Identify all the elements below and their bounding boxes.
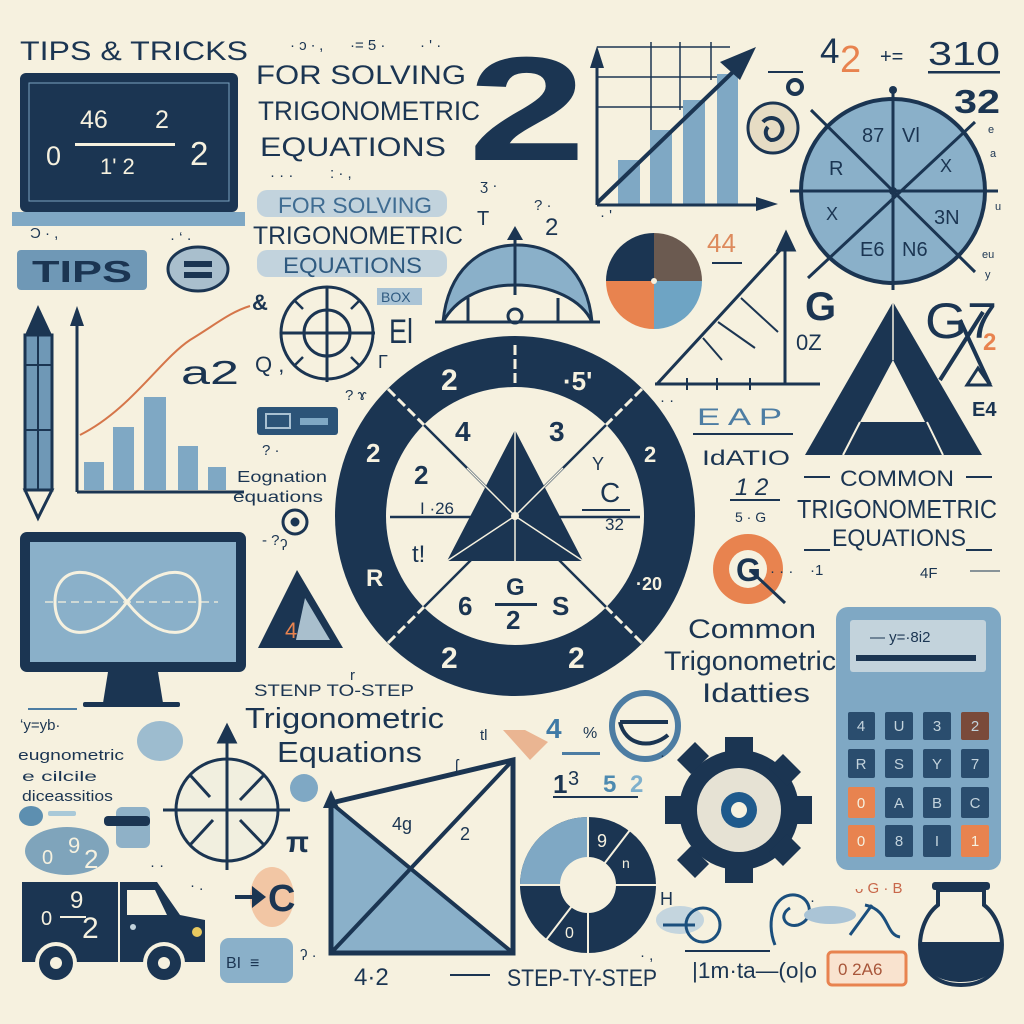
title: for solving trigonometric equations: EQUATIONS — [260, 132, 446, 162]
pie chart bottom center: n — [622, 855, 630, 871]
heading: common trigonometric identities: Trigonometric — [664, 646, 836, 676]
scattered math symbols: ·1 — [810, 562, 823, 579]
icon: target dot — [283, 510, 307, 534]
banner: for solving trigonometric equations: TRIGONOMETRIC — [253, 222, 463, 250]
pie wheel top right: X — [826, 204, 838, 224]
small labels: E1 and box: El — [389, 313, 413, 351]
central circular diagram: S — [552, 591, 569, 621]
small labels: E1 and box — [252, 288, 422, 351]
icon row: blue letters above idatio: E A P — [697, 404, 782, 431]
icon: blue blob — [137, 721, 183, 761]
calculator: 3 — [933, 718, 941, 735]
pie chart quarters — [606, 233, 702, 329]
small math: 1 3 over 52: 5 — [603, 771, 616, 798]
bar chart with rising arrow — [590, 42, 778, 211]
small blue numeral and orange mark: 4 — [546, 713, 562, 744]
scattered math symbols: Γ — [378, 352, 388, 372]
text: small blurred labels lower left: eugnometric — [18, 747, 125, 764]
heading: step-to-step trigonometric equations: Trigonometric — [245, 703, 444, 735]
pill formula: 0 — [42, 847, 53, 869]
small triangle warning icon — [258, 570, 343, 648]
scattered math symbols: · ɔ ∙ , — [290, 37, 323, 54]
side scribbles beside wheel: a — [990, 148, 997, 160]
central circular diagram: C — [600, 477, 620, 508]
arrow with C — [235, 867, 295, 927]
small labels: E1 and box: & — [252, 290, 268, 315]
formula top right: 2 — [840, 39, 861, 81]
central circular diagram: R — [366, 565, 383, 592]
icon: small blue panel: ≡ — [250, 955, 259, 972]
line and bar chart — [70, 306, 250, 492]
central circular diagram: 2 — [644, 442, 656, 467]
pie wheel top right: Vl — [902, 125, 920, 147]
wheel diagram lower left — [163, 726, 290, 870]
calculator: 4 — [857, 718, 865, 735]
icon: oval symbol — [168, 247, 228, 291]
scattered math symbols: · — [810, 892, 815, 909]
scattered math symbols: · · · — [270, 167, 293, 184]
calculator: U — [894, 718, 904, 735]
small math: 1 3 over 52: 1 — [553, 769, 567, 799]
scattered math symbols: ·= 5 · — [350, 37, 385, 54]
calculator: C — [970, 795, 981, 812]
scattered math symbols: ? ɤ — [345, 387, 368, 404]
central circular diagram: 2 — [441, 642, 458, 675]
scattered math symbols: · · — [150, 857, 164, 874]
side scribbles beside wheel — [982, 124, 1001, 281]
scattered math symbols: tl — [480, 727, 488, 744]
letter G and 0Z — [796, 285, 836, 355]
pie wheel top right: E6 — [860, 239, 884, 261]
text: small blurred labels lower left: e cilcile — [22, 768, 97, 784]
small math: 1 3 over 52: 3 — [568, 768, 579, 790]
calculator: 0 — [857, 833, 865, 850]
letter pi glyph: π — [286, 826, 309, 859]
scattered math symbols: - ? — [262, 532, 280, 549]
icon: swirl circle — [612, 693, 678, 759]
small blue numeral and orange mark: % — [583, 725, 597, 742]
calculator: S — [894, 756, 904, 773]
calculator: 0 — [857, 795, 865, 812]
truck icon: 0 — [41, 908, 52, 930]
small labels: E1 and box: BOX — [381, 289, 411, 305]
text: equations blurred labels — [233, 469, 327, 506]
calculator: R — [856, 756, 867, 773]
central circular diagram: 2 — [366, 438, 380, 468]
central circular diagram: 2 — [568, 642, 585, 675]
label: common trigonometric equations banner: COMMON — [840, 466, 954, 491]
flask icon — [920, 882, 1002, 985]
scattered math symbols: 4F — [920, 565, 938, 582]
pie wheel top right: 87 — [862, 125, 884, 147]
heading: common trigonometric identities — [664, 614, 836, 708]
pie chart bottom center: 0 — [565, 925, 574, 942]
central circular diagram: 2 — [506, 605, 520, 635]
heading: step-to-step trigonometric equations: Equations — [277, 737, 422, 769]
pie wheel top right: X — [940, 156, 952, 176]
calculator: Y — [932, 756, 942, 773]
heading: step-to-step trigonometric equations — [245, 681, 444, 769]
central circular diagram: 2 — [441, 364, 458, 397]
banner: for solving trigonometric equations — [253, 190, 463, 278]
text: small blurred labels lower left: diceassitios — [22, 788, 113, 805]
big triangle A icon — [805, 302, 982, 455]
pill formula — [25, 827, 109, 875]
large rectangle with crossing lines — [323, 760, 513, 953]
formula top right: 4 — [820, 32, 839, 71]
fraction label: idatio 1/2: IdATIO — [702, 447, 790, 470]
side scribbles beside wheel: e — [988, 124, 994, 136]
large rectangle with crossing lines: 4g — [392, 814, 412, 834]
label: common trigonometric equations banner: EQUATIONS — [832, 525, 966, 552]
scattered math symbols: Ɔ · , — [30, 225, 58, 242]
pill formula: 9 — [68, 833, 80, 858]
letters top right: G7 — [925, 293, 997, 349]
icon: monitor with fraction: 0 — [46, 141, 61, 171]
icon: spiral beside formula — [768, 72, 803, 94]
scattered math symbols: ʔ — [280, 537, 288, 554]
scattered math symbols: · ' — [600, 207, 612, 224]
small blue numeral and orange mark — [503, 713, 600, 760]
small math: 1 3 over 52 — [553, 768, 643, 799]
pie chart bottom center — [520, 817, 656, 953]
label: step-by-step: STEP-TY-STEP — [507, 965, 657, 992]
badge: tips — [17, 250, 147, 290]
scattered math symbols: · . — [190, 877, 203, 894]
title: for solving trigonometric equations: FOR SOLVING — [256, 60, 466, 90]
pill formula: 2 — [84, 844, 98, 874]
text: equations blurred labels: equations — [233, 489, 323, 506]
pie wheel top right: R — [829, 158, 843, 180]
scattered math symbols: T — [477, 208, 489, 230]
title: tips and tricks: TIPS & TRICKS — [20, 36, 248, 66]
fraction label: idatio 1/2 — [693, 433, 793, 525]
scattered math symbols: · · — [660, 392, 674, 409]
pie wheel top right — [790, 86, 998, 290]
truck icon: 9 — [70, 887, 83, 914]
formula top right — [820, 32, 1000, 120]
label below rectangle — [354, 964, 490, 991]
line and bar chart: a2 — [181, 354, 239, 391]
label: common trigonometric equations banner — [797, 466, 997, 552]
calculator: — y=·8i2 — [870, 629, 930, 646]
title: for solving trigonometric equations: TRIGONOMETRIC — [258, 96, 480, 126]
swirl icons row — [656, 895, 900, 945]
icon: orange circle with G — [713, 534, 785, 604]
big numeral 2: 2 — [468, 27, 586, 192]
small triangle warning icon: 4 — [285, 618, 297, 643]
side scribbles beside wheel: eu — [982, 249, 994, 261]
small blue bits near pill — [19, 806, 76, 826]
scattered math symbols: ʃ — [454, 757, 460, 774]
small marks: right side: E4 — [972, 399, 997, 421]
label below rectangle: 4·2 — [354, 964, 389, 991]
scattered math symbols: ? · — [534, 197, 552, 214]
central circular diagram: 4 — [455, 416, 471, 447]
calculator: 1 — [971, 833, 979, 850]
scattered math symbols: : · , — [330, 165, 352, 182]
text: small blurred labels lower left — [18, 708, 125, 805]
fraction label: idatio 1/2: 5 · G — [735, 509, 766, 525]
central circular diagram — [335, 336, 695, 696]
icon: monitor with fraction: 2 — [155, 106, 169, 134]
scattered math symbols: · ʻ · — [170, 230, 192, 247]
title: for solving trigonometric equations — [256, 60, 480, 162]
calculator: B — [932, 795, 942, 812]
scattered math symbols: —— — [970, 562, 1000, 579]
heading: common trigonometric identities: Idatties — [702, 678, 810, 708]
text: equations blurred labels: Eognation — [237, 469, 327, 486]
pie chart bottom center: 9 — [597, 831, 607, 851]
side scribbles beside wheel: y — [985, 269, 991, 281]
calculator: 8 — [895, 833, 903, 850]
icon: small blue panel: BI — [226, 955, 241, 972]
badge: tips: TIPS — [32, 254, 132, 289]
large rectangle with crossing lines: 2 — [460, 824, 470, 844]
icon: monitor with fraction — [12, 73, 245, 226]
calculator: 2 — [971, 718, 979, 735]
monitor with infinity curve — [20, 532, 246, 707]
icon: small blue panel — [220, 938, 293, 983]
orange number 44 — [707, 228, 742, 264]
scattered math symbols: · ' · — [420, 37, 441, 54]
calculator: 7 — [971, 756, 979, 773]
letters top right — [925, 293, 997, 385]
pencil icon — [25, 305, 52, 518]
formula top right: += — [880, 46, 903, 68]
letter G and 0Z: G — [805, 285, 836, 329]
arrow with C: C — [268, 878, 295, 920]
scattered math symbols: ᴗ G · B — [855, 880, 903, 897]
letters top right: 2 — [983, 329, 996, 356]
icon: gear — [665, 737, 812, 883]
central circular diagram: 6 — [458, 591, 472, 621]
icon: monitor with fraction: 2 — [190, 135, 208, 172]
bottom right outlined formula box — [828, 952, 906, 985]
scattered math symbols: ? · — [262, 442, 280, 459]
calculator — [836, 607, 1001, 870]
target crosshair icon — [280, 287, 375, 382]
heading: common trigonometric identities: Common — [688, 614, 816, 644]
protractor arch — [435, 226, 600, 323]
text: small blurred labels lower left: ʻy=yb· — [20, 717, 60, 734]
pie wheel top right: N6 — [902, 239, 928, 261]
scattered math symbols: Q , — [255, 352, 284, 377]
formula top right: 32 — [954, 83, 1000, 120]
scattered math symbols: 2 — [545, 214, 558, 241]
truck icon: 2 — [82, 912, 99, 945]
scattered math symbols: · · · — [770, 563, 793, 580]
banner: for solving trigonometric equations: EQUATIONS — [283, 253, 422, 278]
icon: hose clip — [104, 807, 150, 848]
truck icon — [22, 882, 205, 984]
right triangle diagram — [655, 233, 820, 390]
icon: monitor with fraction: 46 — [80, 106, 108, 134]
scattered math symbols: r — [350, 667, 355, 684]
scattered math symbols: · — [660, 747, 665, 764]
central circular diagram: 2 — [414, 460, 428, 490]
icon: circle symbol — [748, 103, 798, 153]
label: common trigonometric equations banner: TRIGONOMETRIC — [797, 494, 997, 524]
letter G and 0Z: 0Z — [796, 330, 822, 355]
pill switch icon — [257, 407, 338, 435]
banner: for solving trigonometric equations: FOR SOLVING — [278, 193, 432, 218]
pie wheel top right: 3N — [934, 207, 960, 229]
scattered math symbols: ʔ · — [300, 947, 317, 964]
scattered math symbols: ʒ · — [480, 177, 497, 194]
central circular diagram: ·20 — [636, 574, 662, 594]
icon: orange circle with G: G — [736, 552, 761, 588]
central circular diagram: I ·26 — [420, 499, 454, 518]
icon: small blue drop — [290, 774, 318, 802]
central circular diagram: G — [506, 574, 525, 601]
formula bottom: |1m·ta—(o|o — [692, 958, 817, 983]
central circular diagram: t! — [412, 541, 425, 568]
heading: step-to-step trigonometric equations: STENP TO-STEP — [254, 681, 414, 700]
fraction label: idatio 1/2: 1 2 — [735, 474, 768, 501]
central circular diagram: 32 — [605, 515, 624, 534]
formula top right: 310 — [928, 35, 1000, 72]
bottom right outlined formula box: 0 2A6 — [838, 960, 882, 979]
central circular diagram: Y — [592, 454, 604, 474]
central circular diagram: 3 — [549, 416, 565, 447]
side scribbles beside wheel: u — [995, 201, 1001, 213]
scattered math symbols: H — [660, 889, 673, 909]
icon: monitor with fraction: 1' 2 — [100, 154, 135, 179]
calculator: I — [935, 833, 939, 850]
orange number 44: 44 — [707, 228, 736, 258]
central circular diagram: ·5' — [563, 366, 592, 396]
calculator: A — [894, 795, 904, 812]
small math: 1 3 over 52: 2 — [630, 771, 643, 798]
scattered math symbols: · , — [640, 947, 653, 964]
